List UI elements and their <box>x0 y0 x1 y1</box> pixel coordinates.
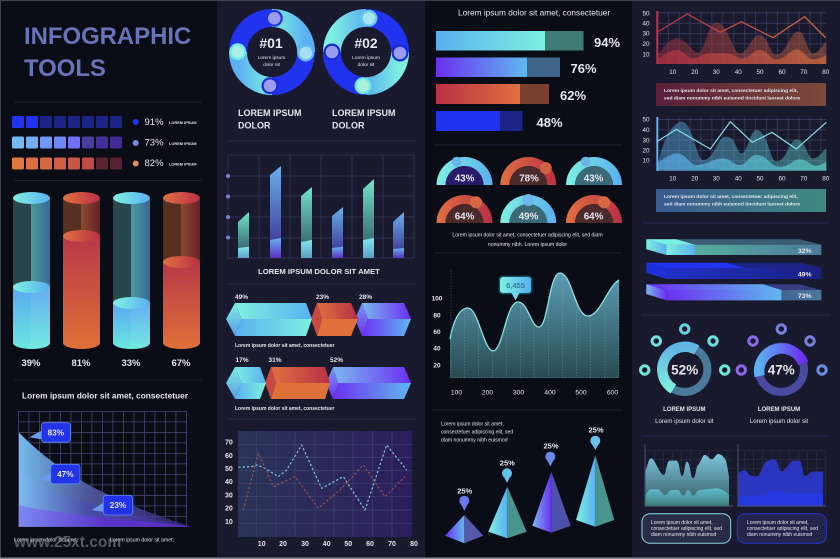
x axis labels: 40 <box>323 541 331 548</box>
caption 1: Lorem ipsum dolor sit amet, consectetuer <box>235 343 335 349</box>
legend: 73% <box>144 138 164 148</box>
y labels: 30 <box>642 137 650 144</box>
y axis labels: 10 <box>225 519 233 526</box>
panel: donut #01: dolor sit <box>263 62 281 68</box>
gauge 64%: 64% <box>455 212 475 222</box>
panel: red layered chart <box>642 10 830 106</box>
pyramid 2: 25% <box>500 458 515 467</box>
cylinder 81% <box>63 192 100 369</box>
donut labels: DOLOR <box>332 120 365 130</box>
gauge 64% <box>436 195 492 223</box>
y axis labels: 60 <box>225 453 233 460</box>
x labels <box>669 176 830 182</box>
text box <box>737 514 826 543</box>
bar 76%: 76% <box>570 61 597 76</box>
pyramid 3: 25% <box>543 442 559 451</box>
text box: diam nonummy nibh euismod <box>747 532 813 538</box>
panel: ring 52%: Lorem ipsum dolor sit <box>655 418 714 425</box>
axes <box>738 444 826 506</box>
gauge 49% <box>500 194 556 223</box>
panel: ring 52%: 52% <box>671 362 698 378</box>
donut labels: DOLOR <box>238 120 271 130</box>
captions and watermark: www.25xt.com <box>13 534 121 551</box>
text box: consectetuer adipiscing elit, sed <box>651 526 722 532</box>
curve <box>450 273 619 351</box>
ring <box>662 347 707 392</box>
cylinder 81%: 81% <box>71 358 91 369</box>
title: TOOLS <box>24 55 106 82</box>
labels: LOREM IPSUM <box>663 407 705 413</box>
y labels: 50 <box>642 117 650 124</box>
y labels: 20 <box>642 147 650 154</box>
x labels: 400 <box>544 390 556 397</box>
x labels: 70 <box>800 176 808 182</box>
red text box <box>656 83 826 106</box>
x labels: 50 <box>756 69 764 76</box>
pyramid 1 <box>445 486 483 543</box>
x labels: 50 <box>756 176 764 182</box>
panel: half gauges <box>436 157 622 248</box>
blue text box: Lorem ipsum dolor sit amet, consectetuer adipiscing elit, <box>664 194 799 200</box>
x labels: 40 <box>735 176 742 182</box>
panel: ring 52% <box>640 325 729 425</box>
value callout: 6,455 <box>506 281 525 290</box>
callout 23%: 23% <box>110 501 127 510</box>
x labels: 10 <box>669 176 677 182</box>
x axis labels <box>258 541 418 548</box>
x labels: 60 <box>778 176 786 182</box>
cylinder 33% <box>113 192 150 369</box>
text box: consectetuer adipiscing elit, sed <box>747 526 818 532</box>
y axis labels: 50 <box>225 466 233 473</box>
y labels: 10 <box>642 51 650 58</box>
captions and watermark <box>13 534 174 551</box>
x labels: 20 <box>691 69 699 76</box>
legend: 91% <box>144 117 164 128</box>
panel: segmented 3D bars <box>226 294 411 412</box>
pyramid 1: 25% <box>457 486 473 495</box>
callout 83% <box>29 423 70 442</box>
pyramid text <box>441 422 513 444</box>
callout 23% <box>92 495 133 515</box>
bar 62% <box>436 84 586 104</box>
bar 48% <box>436 111 563 131</box>
legend: LOREM IPSUM <box>169 120 196 125</box>
y labels <box>432 296 443 369</box>
bar 94% <box>436 31 620 50</box>
gauge 64% second: 64% <box>584 212 604 222</box>
bar 73%: 73% <box>798 293 812 300</box>
panel: ring 47% <box>737 325 826 425</box>
panel: blue layered chart <box>642 117 830 212</box>
x axis labels: 50 <box>344 541 352 548</box>
y labels: 20 <box>433 362 441 369</box>
axis dots <box>226 174 230 240</box>
areas <box>738 459 823 507</box>
panel: donut #02: Lorem ipsum <box>352 55 380 61</box>
small rings <box>640 325 729 374</box>
x labels: 30 <box>713 69 720 76</box>
bars <box>238 166 404 258</box>
x axis labels: 60 <box>366 541 374 548</box>
y axis labels: 20 <box>225 506 233 513</box>
axis bar <box>656 11 658 64</box>
cylinder 39% <box>13 192 50 369</box>
gauge 49%: 49% <box>519 212 539 222</box>
x axis labels: 80 <box>410 541 418 548</box>
x axis labels: 10 <box>258 541 266 548</box>
y axis labels: 70 <box>225 440 233 447</box>
bar row 1 labels: 23% <box>316 294 329 301</box>
labels: LOREM IPSUM <box>758 407 800 413</box>
x labels <box>669 69 830 76</box>
y labels: 40 <box>642 127 650 134</box>
areas <box>657 23 826 64</box>
x labels: 70 <box>800 69 808 76</box>
plot background <box>238 431 412 537</box>
gauge 43% <box>436 157 492 185</box>
heading: Lorem ipsum dolor sit amet, consectetuer <box>22 390 189 400</box>
captions and watermark: Lorem ipsum dolor sit amet, <box>14 538 78 544</box>
text box <box>642 514 731 543</box>
x labels: 600 <box>607 390 618 397</box>
x labels: 100 <box>451 390 462 397</box>
x labels: 500 <box>575 390 587 397</box>
panel: dashed line chart <box>225 431 418 548</box>
y axis labels <box>225 440 233 526</box>
legend: 82% <box>144 158 164 169</box>
axes <box>645 444 733 506</box>
y labels: 100 <box>432 296 443 303</box>
bar 49% <box>646 263 821 279</box>
line <box>657 122 826 149</box>
y labels: 60 <box>433 329 441 336</box>
gauge 43% second: 43% <box>584 174 604 184</box>
x axis labels: 20 <box>279 541 287 548</box>
red text box: sed diam nonummy nibh euismod tincidunt laoreet dolore <box>664 96 800 102</box>
panel: progress squares <box>12 116 196 170</box>
callout 83%: 83% <box>48 428 65 437</box>
bar 49%: 49% <box>798 272 812 278</box>
chart title: LOREM IPSUM DOLOR SIT AMET <box>258 267 380 276</box>
bar row 1 <box>226 303 411 336</box>
small rings <box>737 325 826 374</box>
donut labels <box>238 108 396 130</box>
x labels <box>451 390 618 397</box>
callout 47%: 47% <box>57 470 74 479</box>
caption 2: Lorem ipsum dolor sit amet, consectetuer <box>235 406 335 412</box>
x axis labels: 70 <box>388 541 396 548</box>
axis bar <box>656 117 658 171</box>
cylinder 67%: 67% <box>171 358 191 369</box>
stacked areas <box>19 433 192 527</box>
legend: LOREM IPSUM <box>169 141 196 146</box>
bar 48%: 48% <box>536 115 563 130</box>
x labels: 30 <box>713 176 720 182</box>
bar row 2 <box>226 367 411 399</box>
value callout <box>498 276 532 300</box>
cylinder 33%: 33% <box>121 358 141 369</box>
grid <box>657 11 826 64</box>
bar row 2 labels <box>236 357 343 364</box>
series: red <box>243 453 405 510</box>
callout 47% <box>39 464 80 484</box>
bar 94%: 94% <box>594 35 620 50</box>
panel: flat 3D progress bars <box>646 239 821 300</box>
gauge 78%: 78% <box>519 174 539 184</box>
y labels: 40 <box>433 346 441 353</box>
bar row 2 labels: 52% <box>330 357 343 364</box>
text box: Lorem ipsum dolor sit amet, <box>747 520 809 526</box>
bar 73% <box>646 284 821 300</box>
blue text box: sed diam nonummy nibh euismod tincidunt laoreet dolore <box>664 202 800 208</box>
grid <box>228 155 414 258</box>
y axis labels: 40 <box>225 479 233 486</box>
x labels: 200 <box>482 390 493 397</box>
pyramid text: Lorem ipsum dolor sit amet, <box>441 422 504 428</box>
panel: donut #01: #01 <box>259 35 283 51</box>
bar row 1 labels: 28% <box>359 294 372 301</box>
areas <box>645 454 729 507</box>
gauge caption: nonummy nibh. Lorem ipsum dolor <box>488 242 567 248</box>
captions and watermark: Lorem ipsum dolor sit amet, <box>110 538 174 544</box>
gauge 64% second <box>566 195 622 223</box>
pyramid text: diam nonummy nibh euismod <box>441 438 508 444</box>
panel: peak area chart <box>432 270 619 397</box>
panel: donut #01: Lorem ipsum <box>258 55 285 61</box>
areas <box>657 122 826 171</box>
x axis labels: 30 <box>301 541 309 548</box>
bar 62%: 62% <box>560 88 586 103</box>
text box: Lorem ipsum dolor sit amet, <box>651 520 713 526</box>
y labels: 20 <box>642 41 650 48</box>
panel: ring 47%: Lorem ipsum dolor sit <box>750 418 808 425</box>
gauge caption: Lorem ipsum dolor sit amet, consectetuer adipiscing elit, sed diam <box>452 232 603 238</box>
blue text box <box>656 189 826 212</box>
dotted guides <box>451 270 619 378</box>
title <box>24 23 191 82</box>
panel: 3D bar chart <box>226 155 414 276</box>
pyramid text: consectetuer adipiscing elit, sed <box>441 430 513 436</box>
pyramid 4: 25% <box>588 426 604 435</box>
gauge 43%: 43% <box>455 174 475 184</box>
bar 76% <box>436 58 597 77</box>
x labels: 60 <box>778 69 786 76</box>
pyramid 2 <box>488 458 527 538</box>
x labels: 300 <box>513 390 524 397</box>
squares row 3 <box>12 158 122 170</box>
gauge caption <box>452 232 603 248</box>
x labels: 20 <box>691 176 699 182</box>
panel: mini area chart teal <box>642 444 733 543</box>
red text box: Lorem ipsum dolor sit amet, consectetuer adipiscing elit, <box>664 88 799 94</box>
cylinder 67% <box>163 192 200 369</box>
y labels <box>642 117 650 165</box>
gauge 78% <box>500 157 556 185</box>
x labels: 40 <box>735 69 742 76</box>
panel: mini area chart blue <box>737 444 826 543</box>
x labels: 80 <box>822 69 830 76</box>
y labels: 50 <box>642 10 650 18</box>
panel: pyramids <box>441 422 614 543</box>
title: INFOGRAPHIC <box>24 23 191 50</box>
panel: area chart with callouts <box>13 390 192 551</box>
panel: ring 47%: 47% <box>768 362 795 378</box>
gauge 43% second <box>566 157 622 185</box>
text box: diam nonummy nibh euismod <box>651 532 717 538</box>
series: blue <box>238 445 407 510</box>
heading: Lorem ipsum dolor sit amet, consectetuer <box>458 8 610 18</box>
y labels <box>642 10 650 58</box>
panel: horizontal bars <box>436 8 620 131</box>
donut labels: LOREM IPSUM <box>238 108 302 118</box>
line <box>657 14 826 38</box>
pyramid 4 <box>576 426 614 527</box>
area <box>450 273 619 378</box>
panel: cylinders <box>13 192 200 369</box>
cylinder 39%: 39% <box>21 358 41 369</box>
y labels: 30 <box>642 31 650 38</box>
grid <box>657 117 826 171</box>
y axis labels: 30 <box>225 492 233 499</box>
x labels: 10 <box>669 69 677 76</box>
squares row 1 <box>12 116 122 128</box>
y labels: 80 <box>433 312 441 319</box>
bar row 1 labels: 49% <box>235 294 248 301</box>
bar row 2 labels: 17% <box>236 357 249 364</box>
panel: donut #02 <box>324 10 408 94</box>
y labels: 10 <box>642 158 650 165</box>
panel: donut #01 <box>229 10 314 94</box>
ring <box>759 347 804 392</box>
y labels: 40 <box>642 20 650 28</box>
panel: donut #02: dolor sit <box>358 62 375 68</box>
grid <box>18 411 187 527</box>
bar 32%: 32% <box>798 248 812 255</box>
donut labels: LOREM IPSUM <box>332 108 396 118</box>
legend: LOREM IPSUM <box>169 162 196 166</box>
squares row 2 <box>12 136 122 148</box>
legend <box>133 117 196 169</box>
bar row 1 labels <box>235 294 372 301</box>
panel: donut #02: #02 <box>354 35 378 51</box>
pyramid 3 <box>532 442 571 533</box>
bar row 2 labels: 31% <box>268 357 282 364</box>
bar 32% <box>646 239 821 255</box>
x labels: 80 <box>822 176 830 182</box>
